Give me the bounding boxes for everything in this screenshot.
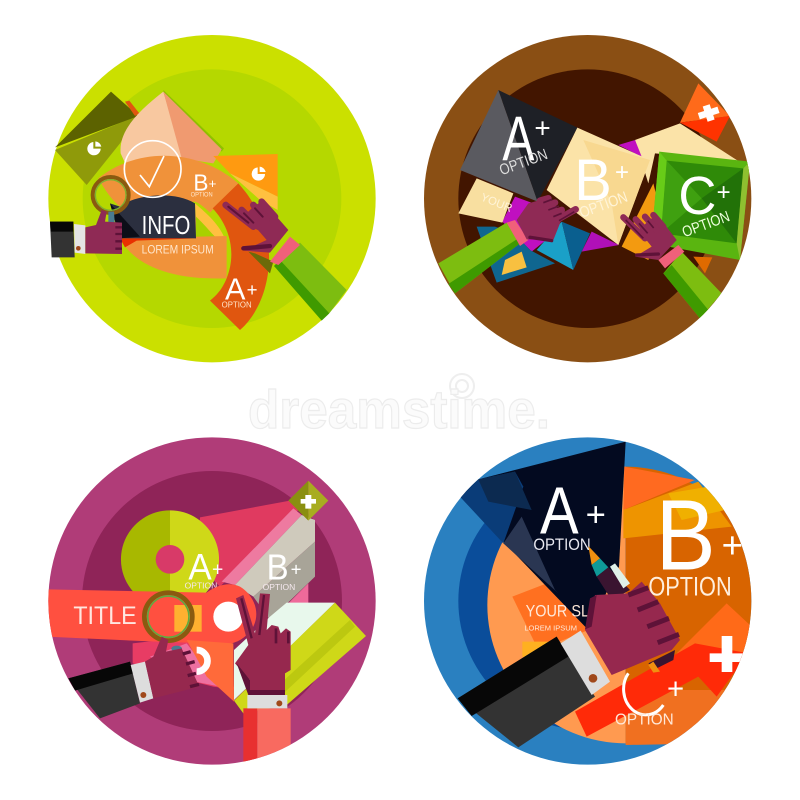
B+ option: B xyxy=(656,479,716,591)
A+ option xyxy=(534,488,604,550)
A+ option: A xyxy=(188,545,212,587)
dark triangle tile xyxy=(460,442,626,630)
C+ tile xyxy=(651,152,750,260)
red plus arrow: + xyxy=(667,673,684,706)
A+ option: OPTION xyxy=(533,535,591,554)
B+ tile xyxy=(547,128,650,245)
yellow leaf xyxy=(195,203,225,239)
A+ option xyxy=(222,272,258,310)
C+ tile: OPTION xyxy=(680,208,732,241)
check mark circle xyxy=(124,141,181,197)
A+ ribbon xyxy=(210,183,269,330)
A+ option: A xyxy=(225,272,246,306)
B+ option: + xyxy=(722,525,743,566)
plus diamond xyxy=(288,481,328,521)
orange slogan tile xyxy=(512,584,586,642)
suit sleeve and hand xyxy=(68,637,199,718)
A+ option: OPTION xyxy=(185,581,217,591)
C+ tile: + xyxy=(717,179,731,206)
green sleeve and pointing hand xyxy=(226,201,347,321)
B+ tile: OPTION xyxy=(577,189,630,222)
orange pie chart tile xyxy=(213,154,278,210)
gray arrow banner with B+ xyxy=(222,508,315,622)
magnifier xyxy=(144,593,207,672)
B+ tile: B xyxy=(574,148,612,213)
B+ option: B xyxy=(193,170,208,196)
red plus tile xyxy=(680,83,730,142)
suit sleeve and hand with magnifier xyxy=(50,177,129,257)
green sleeve and pointing hand, right xyxy=(623,214,722,318)
suit sleeve and hand with pencil xyxy=(458,582,680,747)
B+ option: OPTION xyxy=(191,192,213,198)
watermark: dreamstime. xyxy=(248,380,550,440)
orange ribbon xyxy=(98,156,238,213)
A+ option: + xyxy=(586,496,606,534)
panel: blue circle with pencil xyxy=(424,437,764,765)
INFO label: INFO xyxy=(142,210,190,240)
orange pieces xyxy=(622,184,656,260)
lower pink tile xyxy=(132,641,234,690)
red sleeve and peace hand xyxy=(235,593,291,765)
B+ option: + xyxy=(291,558,302,579)
red plus arrow xyxy=(575,603,752,737)
red plus arrow: OPTION xyxy=(615,712,674,729)
cream card: YOUR SLOGAN: YOUR xyxy=(479,192,514,215)
pink beam xyxy=(197,500,298,587)
purple pieces xyxy=(618,140,642,157)
A+ option: A xyxy=(540,474,579,548)
B+ tile: + xyxy=(615,159,629,186)
B+ option xyxy=(263,554,301,590)
C+ tile: C xyxy=(678,167,716,226)
A+ option: OPTION xyxy=(222,300,252,310)
label text: LOREM IPSUM xyxy=(142,242,214,256)
blue tiles xyxy=(477,222,590,283)
B+ option: OPTION xyxy=(648,571,732,601)
donut with A+ xyxy=(121,510,219,593)
red title ribbon xyxy=(47,584,256,702)
slogan text: YOUR SL xyxy=(526,602,589,621)
INFO label xyxy=(110,195,196,247)
B+ option: OPTION xyxy=(263,582,295,592)
red title ribbon: TITLE xyxy=(73,603,137,630)
B+ option: B xyxy=(267,546,289,587)
A+ option: + xyxy=(212,559,223,580)
orange disc xyxy=(487,467,764,745)
white and lime banner xyxy=(234,603,366,713)
A+ tile xyxy=(460,90,577,202)
B+ option xyxy=(191,170,217,198)
slogan text: LOREM IPSUM xyxy=(524,624,577,633)
A+ option xyxy=(185,554,222,588)
panel: brown circle with options xyxy=(424,35,751,362)
cream card: YOUR SLOGAN xyxy=(458,178,514,223)
panel: magenta circle with TITLE xyxy=(47,437,376,765)
cream strip xyxy=(635,123,738,183)
B+ option xyxy=(649,500,742,596)
panel: lime circle with INFO xyxy=(48,35,376,362)
olive pie chart tile xyxy=(55,92,139,185)
B+ option: + xyxy=(209,176,217,191)
A+ tile: OPTION xyxy=(497,146,550,179)
pencil xyxy=(588,546,675,673)
A+ tile: + xyxy=(534,112,551,143)
peach tile xyxy=(120,90,224,167)
A+ tile: A xyxy=(502,104,534,174)
slogan text xyxy=(525,605,588,630)
A+ option: + xyxy=(247,279,258,300)
green sleeve and pointing hand, left xyxy=(438,198,576,293)
